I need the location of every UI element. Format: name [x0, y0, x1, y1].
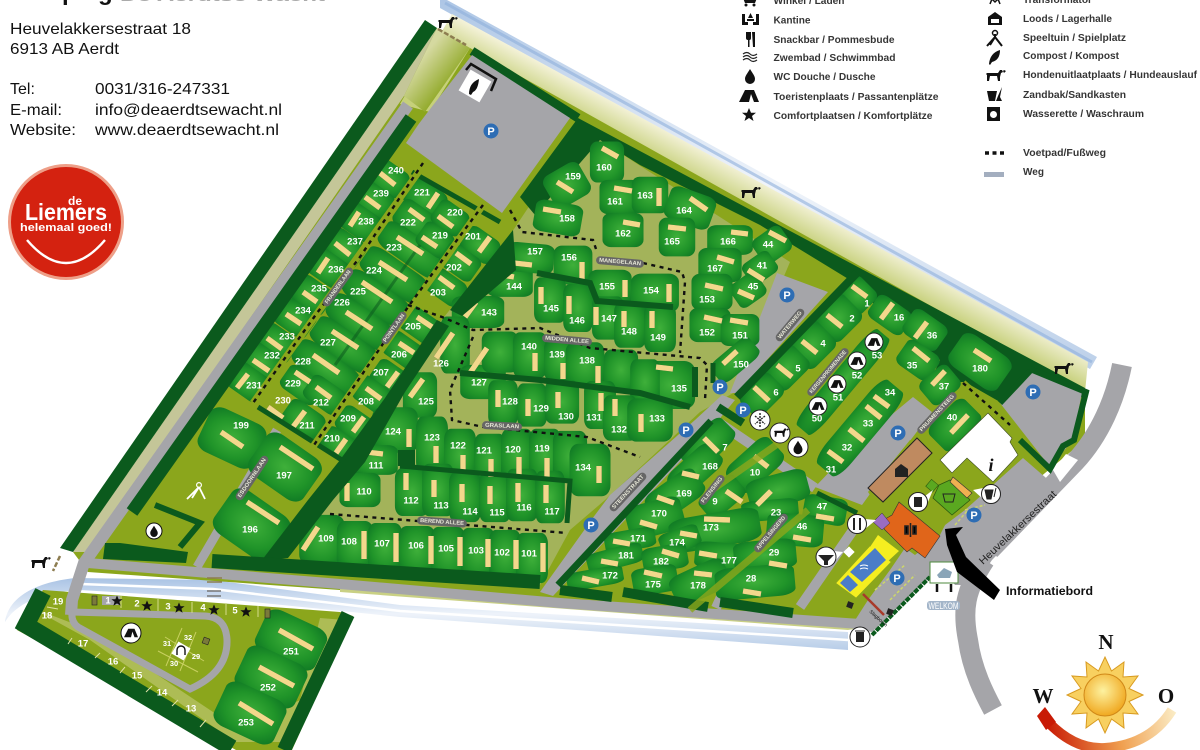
- lot numbers: 145: [543, 304, 560, 315]
- icon: barn circle: [770, 423, 790, 443]
- address block: E-mail:: [10, 102, 62, 119]
- legend: hondenuitlaatplaats: Hondenuitlaatplaats / Hundeauslauf: [1023, 69, 1197, 81]
- camp numbers 13-19: [42, 597, 206, 727]
- camp numbers 13-19: 17: [78, 639, 88, 650]
- lot numbers: 4: [820, 339, 826, 350]
- callout: fontein: [816, 546, 855, 567]
- lot numbers: 53: [872, 351, 882, 362]
- lot numbers: 220: [447, 208, 463, 219]
- lot numbers: 237: [347, 237, 363, 248]
- lot numbers: 138: [579, 356, 595, 367]
- lot numbers: 221: [414, 188, 431, 199]
- lot numbers: 224: [366, 266, 383, 277]
- address block: [10, 21, 282, 139]
- lot numbers: 110: [356, 487, 372, 498]
- page heading (cropped at top edge): [10, 0, 326, 6]
- lot numbers: 156: [561, 253, 577, 264]
- lot numbers: 166: [720, 237, 736, 248]
- lot numbers: 230: [275, 396, 291, 407]
- legend: compost: Compost / Kompost: [1023, 50, 1119, 62]
- lot numbers: 129: [533, 404, 549, 415]
- address block: www.deaerdtsewacht.nl: [94, 122, 279, 139]
- lot numbers: 7: [722, 443, 728, 454]
- orange strip building: [950, 477, 972, 498]
- lot numbers: 169: [676, 489, 692, 500]
- lots: west block: [224, 155, 503, 466]
- label: Informatiebord: Informatiebord: [1006, 586, 1093, 598]
- lot numbers: 207: [373, 368, 389, 379]
- lot numbers: 115: [489, 508, 505, 519]
- playground area icons: [146, 483, 205, 539]
- lot numbers: 164: [676, 206, 693, 217]
- lot numbers: 51: [833, 393, 844, 404]
- logo: de Liemers helemaal goed: helemaal goed!: [20, 222, 112, 234]
- legend: voetpad: [985, 147, 1106, 159]
- brown storage building: [868, 438, 932, 502]
- road name labels: WATERWEG: [777, 310, 804, 340]
- lot numbers: 2: [849, 314, 855, 325]
- legend column 2: [984, 0, 1197, 178]
- legend: transformator: [990, 0, 1092, 6]
- lot numbers: 233: [279, 332, 295, 343]
- address block: info@deaerdtsewacht.nl: [95, 102, 282, 119]
- footpaths: [53, 29, 1010, 596]
- trailer stalling by entrance: [846, 594, 894, 629]
- lot numbers: 181: [618, 551, 635, 562]
- lot numbers: 103: [468, 546, 484, 557]
- south camping field: [17, 590, 353, 750]
- welkom board: WELKOM: [928, 601, 958, 611]
- purple snackbar: [873, 513, 890, 530]
- legend: compost: [989, 50, 1119, 65]
- lot numbers: 148: [621, 327, 637, 338]
- road name labels: APPELSINGERD: [756, 515, 787, 551]
- icon: playground: [187, 483, 205, 499]
- camp numbers 13-19: 16: [108, 657, 118, 668]
- lot numbers: 47: [817, 502, 827, 513]
- road name labels: MANEGELAAN: [599, 258, 641, 267]
- logo: de Liemers helemaal goed: Liemers: [25, 199, 107, 225]
- lot numbers: 41: [757, 261, 768, 272]
- lot numbers: 1: [864, 299, 870, 310]
- lot numbers: 124: [385, 427, 402, 438]
- lot numbers: 165: [664, 237, 681, 248]
- lot numbers: 5: [795, 364, 801, 375]
- lot numbers: 28: [746, 574, 756, 585]
- legend: wc douche: [745, 69, 876, 84]
- lot numbers: 208: [358, 397, 374, 408]
- lot numbers: 52: [852, 371, 862, 382]
- road name labels: FLENSING: [700, 476, 724, 504]
- lot numbers: 116: [516, 503, 532, 514]
- lot numbers: 50: [812, 414, 822, 425]
- dashed parking marks: [875, 505, 985, 600]
- lot numbers: 173: [703, 523, 719, 534]
- lot numbers: 106: [408, 541, 424, 552]
- lot numbers: 32: [842, 443, 852, 454]
- lot numbers: 182: [653, 557, 669, 568]
- lot numbers: [233, 163, 988, 729]
- lot numbers: 180: [972, 364, 988, 375]
- lot numbers: 231: [246, 381, 263, 392]
- lot numbers: 160: [596, 163, 612, 174]
- lot numbers: 126: [433, 359, 449, 370]
- parking markers: [484, 124, 1040, 586]
- road name labels: KERSENPROMENADE: [809, 350, 848, 395]
- lot numbers: 111: [369, 461, 384, 472]
- lot numbers: 40: [947, 413, 957, 424]
- lot numbers: 172: [602, 571, 618, 582]
- lot numbers: 170: [651, 509, 667, 520]
- callout: wasserette: [908, 490, 933, 512]
- lot numbers: 123: [424, 433, 440, 444]
- compass letters: W: [1032, 684, 1054, 708]
- south camp details: [42, 595, 270, 727]
- legend: zandbak: Zandbak/Sandkasten: [1023, 89, 1126, 101]
- lot numbers: 196: [242, 525, 258, 536]
- lot numbers: 253: [238, 718, 254, 729]
- lot numbers: 16: [894, 313, 904, 324]
- lot numbers: 167: [707, 264, 723, 275]
- lot numbers: 133: [649, 414, 665, 425]
- lot numbers: 211: [299, 421, 315, 432]
- lot numbers: 127: [471, 378, 487, 389]
- lots: south-east block: [565, 414, 849, 609]
- lot numbers: 108: [341, 537, 357, 548]
- lot numbers: 35: [907, 361, 918, 372]
- lot numbers: 223: [386, 243, 402, 254]
- central square with sites 29-32: 30: [170, 659, 178, 668]
- comfort row strip: [92, 595, 270, 618]
- lot numbers: 140: [521, 342, 537, 353]
- lot numbers: 113: [433, 501, 449, 512]
- lot numbers: 114: [462, 507, 478, 518]
- road name labels: PRUIMENSTEEG: [919, 394, 956, 433]
- legend: weg: Weg: [1023, 166, 1044, 178]
- lot numbers: 175: [645, 580, 662, 591]
- legend: snackbar: Snackbar / Pommesbude: [774, 34, 895, 46]
- road name labels: POINTLAAN: [382, 313, 406, 344]
- inner hedges: [103, 118, 857, 613]
- lot numbers: 238: [358, 217, 374, 228]
- compass letters: [1032, 630, 1174, 708]
- lot numbers: 34: [885, 388, 896, 399]
- lot numbers: 171: [630, 534, 647, 545]
- camp numbers 13-19: 15: [132, 671, 143, 682]
- lot numbers: 117: [544, 507, 560, 518]
- lot numbers: 239: [373, 189, 389, 200]
- lot numbers: 168: [702, 462, 718, 473]
- road name labels: ESDOORNLAAN: [237, 458, 268, 499]
- compass with sun path: [1032, 630, 1174, 748]
- legend: speeltuin: [987, 30, 1126, 46]
- river north-east: [440, 0, 1097, 369]
- sun arc arrow: [1037, 707, 1172, 748]
- compost site with icon: [459, 64, 496, 102]
- orange kantine: [880, 502, 940, 558]
- lot numbers: 121: [476, 446, 493, 457]
- address block: 0031/316-247331: [95, 81, 230, 98]
- lot numbers: 161: [607, 197, 624, 208]
- lots: north-east block: [737, 273, 1015, 480]
- lot numbers: 9: [712, 497, 718, 508]
- lot numbers: 157: [527, 247, 543, 258]
- lot numbers: 37: [939, 382, 949, 393]
- lot numbers: 31: [826, 465, 837, 476]
- legend: voetpad: Voetpad/Fußweg: [1023, 147, 1106, 159]
- central square with sites 29-32: 29: [192, 652, 200, 661]
- lot numbers: 229: [285, 379, 301, 390]
- shop building green: [926, 479, 970, 515]
- lot numbers: 202: [446, 263, 462, 274]
- legend: winkel: [743, 0, 844, 7]
- lot numbers: 105: [438, 544, 455, 555]
- logo: de Liemers helemaal goed: de: [68, 194, 82, 208]
- callout: zandbak: [973, 484, 1000, 504]
- icon: trash circle: [850, 627, 870, 647]
- legend: wasserette: [987, 107, 1144, 121]
- lots: central block: [372, 241, 695, 453]
- lot numbers: 125: [418, 397, 435, 408]
- comfort row strip: 5: [232, 606, 238, 617]
- lots: north block: [532, 141, 795, 386]
- lot numbers: 159: [565, 172, 581, 183]
- central square with sites 29-32: 32: [184, 633, 192, 642]
- lot numbers: 109: [318, 534, 334, 545]
- lot numbers: 122: [450, 441, 466, 452]
- lot numbers: 234: [295, 306, 312, 317]
- lot numbers: 158: [559, 214, 575, 225]
- icon: drop circle: [788, 437, 808, 457]
- trailer stalling by entrance: Slagboom: [868, 609, 888, 629]
- lot numbers: 112: [403, 496, 419, 507]
- legend: loods: Loods / Lagerhalle: [1023, 13, 1112, 25]
- legend column 1: [739, 0, 939, 122]
- legend: kantine: [742, 13, 811, 26]
- lot numbers: 163: [637, 191, 653, 202]
- comfort row strip: 4: [200, 603, 206, 614]
- white info building: [940, 413, 1018, 482]
- lot numbers: 144: [506, 282, 523, 293]
- lot numbers: 226: [334, 298, 350, 309]
- lot numbers: 120: [505, 445, 521, 456]
- lot numbers: 206: [391, 350, 407, 361]
- lot numbers: 235: [311, 284, 328, 295]
- legend: loods: [988, 12, 1112, 25]
- camp numbers 13-19: 18: [42, 611, 52, 622]
- lot numbers: 251: [283, 647, 300, 658]
- address block: 6913 AB Aerdt: [10, 41, 120, 58]
- lot numbers: 205: [405, 322, 422, 333]
- arrow to information board: [945, 527, 1000, 600]
- legend: zwembad: Zwembad / Schwimmbad: [774, 52, 896, 64]
- lot numbers: 201: [465, 232, 482, 243]
- legend: kantine: Kantine: [774, 14, 811, 26]
- lot numbers: 45: [748, 282, 759, 293]
- lot numbers: 225: [350, 287, 367, 298]
- central square with sites 29-32: 31: [163, 639, 171, 648]
- road name labels: [234, 256, 958, 554]
- lot numbers: 197: [276, 471, 292, 482]
- lot numbers: 132: [611, 425, 627, 436]
- lot numbers: 102: [494, 548, 510, 559]
- lot numbers: 232: [264, 351, 280, 362]
- lot numbers: 130: [558, 412, 574, 423]
- lot numbers: 46: [797, 522, 807, 533]
- lots: south-west block: [194, 403, 331, 749]
- road name labels: BEREND ALLEE: [420, 518, 464, 527]
- compass letters: O: [1158, 684, 1174, 708]
- road name labels: FRANDERLAAN: [324, 269, 353, 305]
- lot numbers: 240: [388, 166, 404, 177]
- lot numbers: 23: [771, 508, 781, 519]
- legend: tent: Toeristenplaats / Passantenplätze: [774, 91, 939, 103]
- lot numbers: 228: [295, 357, 311, 368]
- address block: Heuvelakkersestraat 18: [10, 21, 191, 38]
- lot numbers: 203: [430, 288, 446, 299]
- lot numbers: 227: [320, 338, 336, 349]
- lot numbers: 135: [671, 384, 688, 395]
- legend: speeltuin: Speeltuin / Spielplatz: [1023, 32, 1126, 44]
- lot numbers: 33: [863, 419, 873, 430]
- welkom board: [927, 562, 960, 611]
- legend: star: Comfortplaatsen / Komfortplätze: [774, 110, 933, 122]
- outer hedges: [60, 20, 1085, 552]
- central olive yard: [868, 440, 962, 533]
- icon: wc drop: [146, 523, 162, 539]
- lot numbers: 147: [601, 314, 617, 325]
- lot numbers: 152: [699, 328, 715, 339]
- map base land: [73, 14, 1088, 630]
- lot numbers: 199: [233, 421, 249, 432]
- lot numbers: 44: [763, 240, 774, 251]
- lot numbers: 6: [773, 388, 779, 399]
- legend: wc douche: WC Douche / Dusche: [774, 71, 876, 83]
- camp numbers 13-19: 19: [53, 597, 63, 608]
- icon: sun: [1067, 657, 1143, 733]
- lot numbers: 236: [328, 265, 344, 276]
- lot numbers: 210: [324, 434, 340, 445]
- icon: tent in camp field: [121, 623, 141, 643]
- lot numbers: 149: [650, 333, 666, 344]
- callout: snackbar: [848, 514, 876, 534]
- legend: wasserette: Wasserette / Waschraum: [1023, 108, 1144, 120]
- road name labels: GRASLAAN: [485, 423, 519, 430]
- central square with sites 29-32: [158, 628, 210, 672]
- camp numbers 13-19: 14: [157, 688, 168, 699]
- legend: weg: [984, 166, 1044, 178]
- comfort row strip: 1: [105, 596, 111, 607]
- lot numbers: 128: [502, 397, 518, 408]
- lot numbers: 174: [669, 538, 686, 549]
- dog walking icons: [31, 17, 1074, 568]
- compass letters: N: [1098, 630, 1114, 654]
- icon: transformer circle: [750, 410, 770, 430]
- lot numbers: 139: [549, 350, 565, 361]
- camp numbers 13-19: 13: [186, 704, 196, 715]
- lot numbers: 36: [927, 331, 937, 342]
- lot numbers: 219: [432, 231, 448, 242]
- lot numbers: 107: [374, 539, 390, 550]
- river south: [5, 578, 848, 650]
- lot numbers: 119: [534, 444, 550, 455]
- road name Heuvelakkersestraat: Heuvelakkersestraat: [977, 488, 1059, 567]
- lot numbers: 209: [340, 414, 356, 425]
- swimming pool: [837, 535, 899, 597]
- lot numbers: 131: [586, 413, 603, 424]
- lot numbers: 29: [769, 548, 779, 559]
- lot numbers: 134: [575, 463, 592, 474]
- legend: snackbar: [746, 32, 895, 47]
- lot numbers: 154: [643, 286, 660, 297]
- lot numbers: 150: [733, 360, 749, 371]
- lot numbers: 151: [732, 331, 749, 342]
- lot numbers: 155: [599, 282, 616, 293]
- lot numbers: 178: [690, 581, 706, 592]
- white info building: i: [988, 455, 994, 475]
- lot numbers: 252: [260, 683, 276, 694]
- reception buildings: [837, 413, 1018, 600]
- service icons near parking: [750, 410, 870, 647]
- lot numbers: 222: [400, 218, 416, 229]
- logo: de Liemers helemaal goed: [8, 164, 124, 280]
- address block: Website:: [10, 122, 76, 139]
- lot numbers: 10: [750, 468, 760, 479]
- comfort row strip: 2: [134, 599, 140, 610]
- address block: Tel:: [10, 81, 35, 98]
- lot numbers: 162: [615, 229, 631, 240]
- lot numbers: 177: [721, 556, 737, 567]
- lots: berend allee block: [299, 416, 611, 583]
- lot numbers: 146: [569, 316, 585, 327]
- road name labels: STEENSTRAAT: [611, 474, 646, 510]
- lot numbers: 212: [313, 398, 329, 409]
- lot numbers: 101: [521, 549, 538, 560]
- road name labels: MIDDEN ALLEE: [545, 336, 589, 345]
- lot numbers: 143: [481, 308, 497, 319]
- legend: zandbak: [987, 87, 1126, 101]
- roads: [71, 55, 1122, 710]
- inner olive path strips: [253, 170, 1010, 610]
- lot numbers: 153: [699, 295, 715, 306]
- comfort row strip: 3: [165, 602, 171, 613]
- camp tents row: [809, 333, 883, 415]
